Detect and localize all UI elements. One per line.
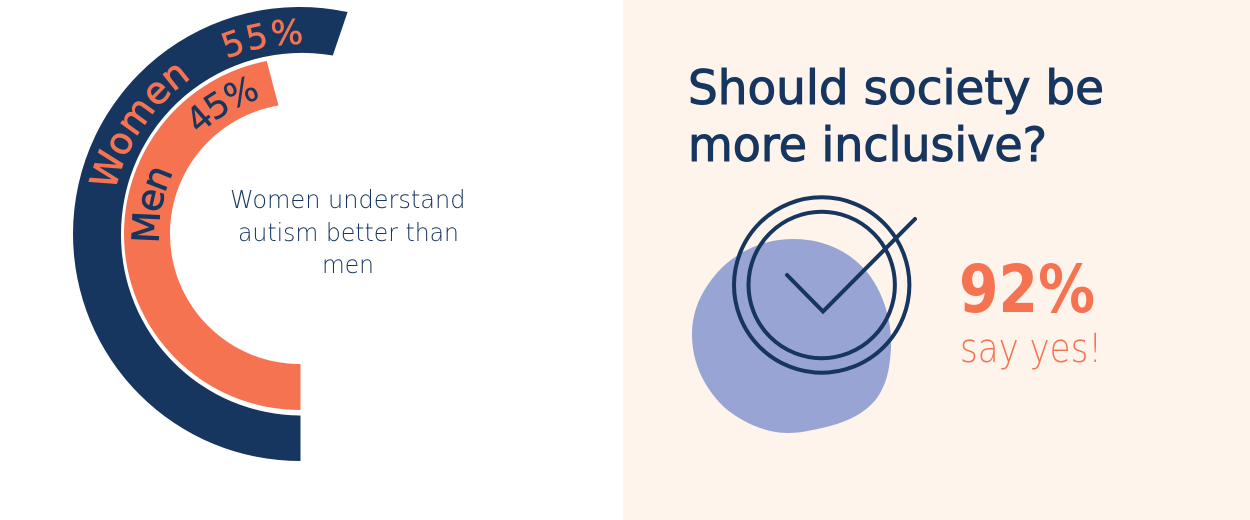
panel: inclusive society: [623, 0, 1250, 520]
arc: men 45%: [124, 61, 300, 410]
text: chart caption: men: [322, 250, 374, 279]
heading: [688, 61, 1104, 173]
label: 45%: 45%: [191, 76, 258, 130]
text: chart caption: [230, 185, 466, 279]
icon: blob: [692, 239, 891, 433]
text: chart caption: autism better than: [238, 218, 459, 247]
stat caption: say yes!: say yes!: [960, 326, 1102, 372]
heading: Should society be: [688, 61, 1104, 116]
label: Women: Women: [88, 66, 190, 184]
label: Men: Men: [131, 168, 172, 240]
text: chart caption: Women understand: [230, 185, 466, 214]
arc: women 55%: [73, 7, 348, 461]
label: 55%: 55%: [221, 18, 302, 58]
stat: 92%: 92%: [959, 251, 1095, 328]
panel: women vs men chart: [73, 7, 466, 461]
heading: more inclusive?: [688, 118, 1047, 173]
icon: check mark in double circle: [734, 197, 915, 373]
